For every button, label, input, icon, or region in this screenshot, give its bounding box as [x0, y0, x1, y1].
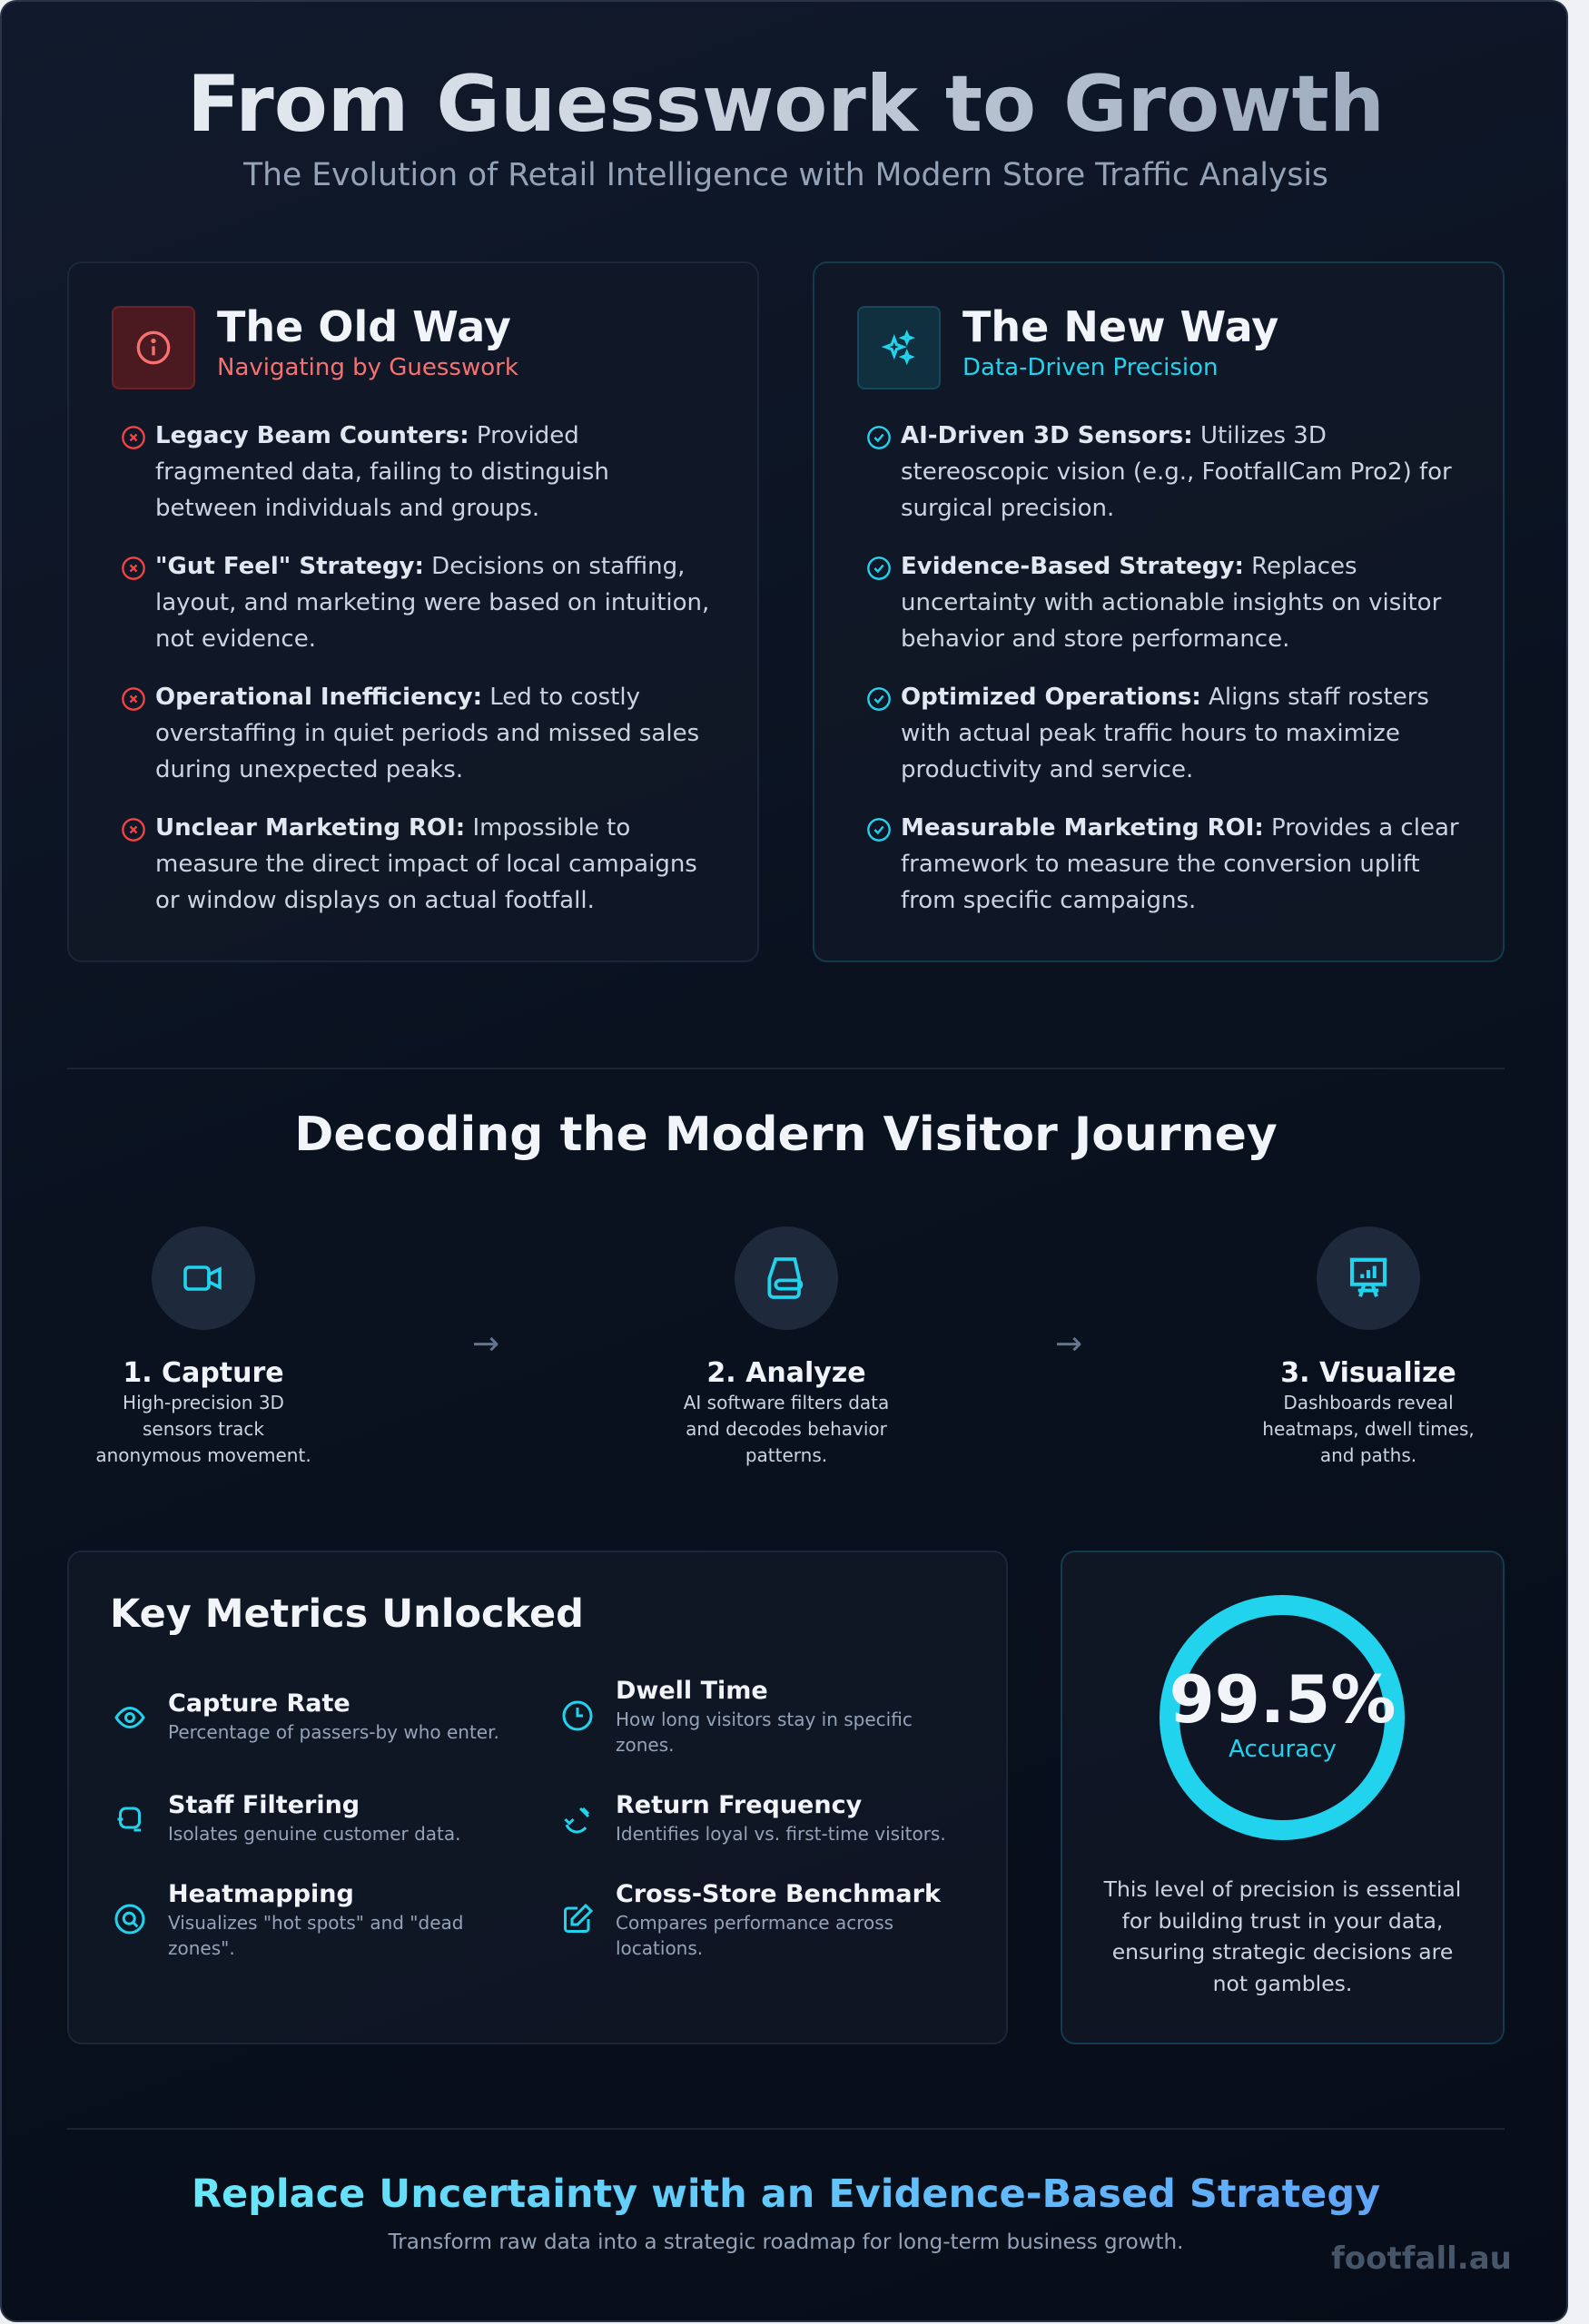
metric: heatmapping: zones". — [168, 1937, 235, 1959]
list: old way items — [122, 422, 709, 914]
heading: visitor journey: Decoding the Modern Visitor Journey — [294, 1108, 1278, 1162]
item: Measurable Marketing ROI: Provides a clear framework to measure the conversion uplift from specific campaigns. — [901, 814, 1459, 914]
panel: old way — [67, 261, 759, 962]
brand: footfall.au — [1331, 2240, 1512, 2277]
metric: dwell time: Dwell Time — [616, 1677, 768, 1705]
step: visualize: 3. Visualize — [1280, 1357, 1456, 1389]
icon: sparkles — [857, 306, 941, 389]
stat: 99.5%: 99.5% — [1170, 1661, 1396, 1738]
item: Optimized Operations: Aligns staff rosters with actual peak traffic hours to maximize productivity and service. — [901, 684, 1429, 783]
step: capture — [95, 1226, 311, 1466]
metric: dwell time: How long visitors stay in specific — [616, 1709, 913, 1730]
text: cta sub: Transform raw data into a strategic roadmap for long-term business growth. — [389, 2230, 1183, 2254]
title: From Guesswork to Growth — [187, 59, 1385, 150]
step: analyze: and decodes behavior — [686, 1418, 887, 1440]
title — [2, 54, 1570, 154]
metric: benchmark: locations. — [616, 1937, 703, 1959]
metric: benchmark: Compares performance across — [616, 1912, 893, 1934]
label: accuracy: Accuracy — [1229, 1736, 1337, 1763]
step: analyze: AI software filters data — [684, 1392, 889, 1413]
metric: staff filtering: Staff Filtering — [168, 1791, 360, 1819]
step: visualize: heatmaps, dwell times, — [1262, 1418, 1475, 1440]
item: Legacy Beam Counters: Provided fragmented data, failing to distinguish between individuals and groups. — [155, 422, 609, 522]
step: capture: anonymous movement. — [95, 1444, 311, 1466]
metric: staff filtering: Isolates genuine customer data. — [168, 1823, 460, 1845]
metric: heatmapping: Heatmapping — [168, 1880, 354, 1908]
step: visualize: Dashboards reveal — [1283, 1392, 1454, 1413]
step: visualize: and paths. — [1320, 1444, 1416, 1466]
metric: heatmapping — [114, 1880, 463, 1959]
metric: capture rate: Percentage of passers-by who enter. — [168, 1721, 499, 1743]
icon: dashboard — [1317, 1226, 1420, 1330]
step: analyze — [684, 1226, 889, 1466]
metric: capture rate: Capture Rate — [168, 1689, 350, 1718]
metric: dwell time — [563, 1677, 913, 1756]
step: analyze: 2. Analyze — [706, 1357, 866, 1389]
panel: key metrics — [67, 1551, 1008, 2044]
item: Evidence-Based Strategy: Replaces uncertainty with actionable insights on visitor behavior and store performance. — [901, 553, 1441, 653]
metric: heatmapping: Visualizes "hot spots" and "dead — [168, 1912, 463, 1934]
arrow: → — [1055, 1325, 1082, 1363]
icon: info — [112, 306, 195, 389]
metric: return frequency — [565, 1791, 946, 1845]
subheading: Navigating by Guesswork — [217, 354, 518, 381]
text: precision note: This level of precision is essential for building trust in your data, ensuring strategic decisions are not gambles. — [1104, 1876, 1461, 1995]
item: "Gut Feel" Strategy: Decisions on staffing, layout, and marketing were based on intuition, not evidence. — [155, 553, 709, 653]
metric: return frequency: Return Frequency — [616, 1791, 862, 1819]
list: new way items — [867, 422, 1459, 914]
heading: key metrics: Key Metrics Unlocked — [110, 1591, 584, 1637]
metric: dwell time: zones. — [616, 1734, 674, 1756]
subtitle: The Evolution of Retail Intelligence with Modern Store Traffic Analysis — [243, 157, 1328, 193]
item: Operational Inefficiency: Led to costly overstaffing in quiet periods and missed sales during unexpected peaks. — [155, 684, 699, 783]
item: Unclear Marketing ROI: Impossible to measure the direct impact of local campaigns or window displays on actual footfall. — [155, 814, 697, 914]
heading: old way: The Old Way — [217, 302, 511, 351]
icon: camera — [152, 1226, 255, 1330]
step: capture: High-precision 3D — [123, 1392, 284, 1413]
arrow: → — [472, 1325, 499, 1363]
item: AI-Driven 3D Sensors: Utilizes 3D stereoscopic vision (e.g., FootfallCam Pro2) for surgical precision. — [901, 422, 1452, 522]
heading: new way: The New Way — [962, 302, 1278, 351]
step: visualize — [1262, 1226, 1475, 1466]
heading: call to action: Replace Uncertainty with an Evidence-Based Strategy — [192, 2171, 1380, 2217]
panel: new way — [813, 261, 1505, 962]
icon: analyze — [735, 1226, 838, 1330]
metric: staff filtering — [118, 1791, 460, 1845]
metric: benchmark: Cross-Store Benchmark — [616, 1880, 941, 1908]
panel: accuracy — [1061, 1551, 1505, 2044]
subheading: Data-Driven Precision — [962, 354, 1219, 381]
chart: accuracy ring — [1160, 1595, 1405, 1840]
step: analyze: patterns. — [745, 1444, 827, 1466]
metric: capture rate — [114, 1689, 499, 1743]
step: capture: sensors track — [143, 1418, 264, 1440]
step: capture: 1. Capture — [123, 1357, 284, 1389]
metric: benchmark — [564, 1880, 941, 1959]
metric: return frequency: Identifies loyal vs. first-time visitors. — [616, 1823, 946, 1845]
